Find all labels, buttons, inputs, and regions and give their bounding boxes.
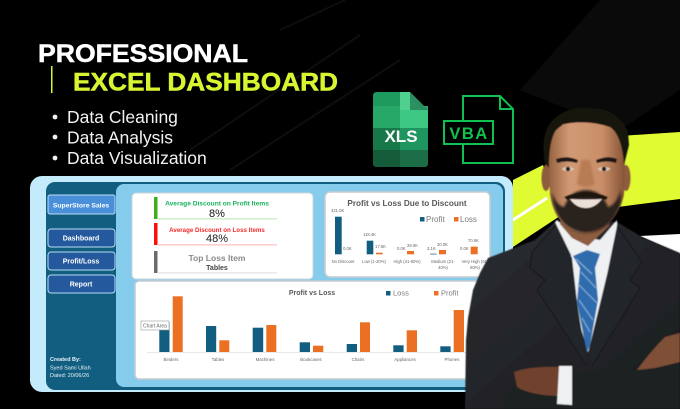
author credit: Syed Sami Ullah <box>50 366 91 372</box>
chart area tooltip: Chart Area <box>143 324 167 330</box>
chart axis labels: Very High (61- <box>462 259 489 264</box>
category labels: Phones <box>445 357 460 362</box>
category labels: Appliances <box>394 357 417 362</box>
chart: profit vs loss by category: Profit vs Loss <box>289 290 335 297</box>
loss bars <box>159 322 451 352</box>
lime swoosh <box>513 132 680 254</box>
dashboard screenshot <box>30 176 513 392</box>
chart legend <box>386 288 459 298</box>
face <box>548 118 625 233</box>
bullet list: Data Analysis <box>67 128 173 148</box>
sidebar navigation: Profit/Loss <box>63 258 99 266</box>
icon: XLS file <box>373 92 428 167</box>
moustache <box>564 192 608 200</box>
author credit: Created By: <box>50 357 81 363</box>
KPI card <box>132 193 313 279</box>
title divider <box>51 66 52 93</box>
KPI: loss discount: 48% <box>206 233 228 245</box>
neck <box>560 205 610 246</box>
chart legend: Profit <box>441 288 459 298</box>
content area <box>116 184 503 387</box>
sidebar navigation: Dashboard <box>63 236 99 242</box>
suit jacket <box>465 222 680 409</box>
chart axis labels: 40%) <box>438 265 448 270</box>
author credit: Dated: 20/06/26 <box>50 373 89 379</box>
category labels: Binders <box>164 357 179 362</box>
chart value labels: 30.0K <box>437 242 448 247</box>
baseline <box>147 351 467 354</box>
tie <box>573 250 600 353</box>
chart value labels: 28.0K <box>407 243 418 248</box>
chart bars <box>335 217 478 254</box>
chart: profit vs loss due to discount <box>325 192 490 277</box>
KPI: profit discount: 8% <box>209 208 225 220</box>
dashboard frame <box>30 176 513 392</box>
sidebar navigation <box>48 195 115 293</box>
profit bars <box>173 296 464 352</box>
chart axis labels: No Discount <box>332 259 355 264</box>
left hand <box>514 367 560 396</box>
chart value labels: 70.6K <box>468 238 479 243</box>
icon: VBA file <box>444 96 513 163</box>
chart: profit vs loss by category <box>135 281 490 379</box>
lapels <box>530 226 642 366</box>
head <box>542 108 630 233</box>
chart value labels: 3.1K <box>427 246 436 251</box>
crossed arms <box>505 333 680 409</box>
title: PROFESSIONAL <box>38 40 248 68</box>
chart value labels: 118.4K <box>363 232 376 237</box>
KPI: top loss item: Tables <box>206 265 228 272</box>
bullet list: Data Cleaning <box>67 107 178 127</box>
portrait of presenter <box>465 108 680 409</box>
chart axis labels <box>332 259 489 270</box>
bullet list: Data Visualization <box>67 148 207 168</box>
right hand <box>637 333 680 370</box>
mouth <box>570 199 602 208</box>
shirt <box>555 220 617 354</box>
category labels <box>164 357 460 362</box>
KPI: top loss item <box>154 251 277 273</box>
nose <box>577 160 595 187</box>
category labels: Chairs <box>352 357 365 362</box>
title: EXCEL DASHBOARD <box>73 68 338 96</box>
sidebar navigation: SuperStore Sales <box>53 202 109 210</box>
chart legend: Profit <box>426 215 445 224</box>
chart value labels: 0.0K <box>343 246 352 251</box>
chart: profit vs loss due to discount: Profit vs Loss Due to Discount <box>347 199 467 208</box>
chart axis labels: Medium (21- <box>431 259 455 264</box>
author credit <box>50 357 91 379</box>
beard <box>552 190 621 233</box>
icon: VBA file: VBA <box>449 125 489 143</box>
category labels: Bookcases <box>300 357 323 362</box>
KPI: profit discount: Average Discount on Profit Items <box>165 200 269 208</box>
chart legend <box>420 215 477 224</box>
icon: XLS file: XLS <box>384 127 418 146</box>
KPI: loss discount <box>154 223 277 245</box>
ears <box>542 165 550 191</box>
chart legend: Loss <box>460 215 477 224</box>
shirt cuff <box>557 366 572 405</box>
eyes and brows <box>556 157 617 171</box>
hair <box>543 108 629 165</box>
bullet list <box>53 107 207 168</box>
chart axis labels: High (41-60%) <box>394 259 421 264</box>
chart area tooltip <box>141 321 169 330</box>
chart axis labels: Low (1-20%) <box>362 259 386 264</box>
title <box>38 40 338 96</box>
category labels: Tables <box>212 357 225 362</box>
chart value labels: 0.0K <box>460 246 469 251</box>
KPI: top loss item: Top Loss Item <box>188 253 246 263</box>
chart value labels <box>331 208 479 251</box>
chart axis labels: 80%) <box>470 265 480 270</box>
chart value labels: 0.0K <box>397 246 406 251</box>
sidebar navigation: Report <box>70 282 93 288</box>
forearm <box>505 345 680 409</box>
category labels: Machines <box>256 357 275 362</box>
chart value labels: 17.6K <box>375 244 386 249</box>
KPI: loss discount: Average Discount on Loss Items <box>169 227 265 234</box>
sidebar panel <box>46 182 505 390</box>
chart legend: Loss <box>393 288 409 298</box>
KPI: profit discount <box>154 197 277 220</box>
chart value labels: 321.0K <box>331 208 344 213</box>
